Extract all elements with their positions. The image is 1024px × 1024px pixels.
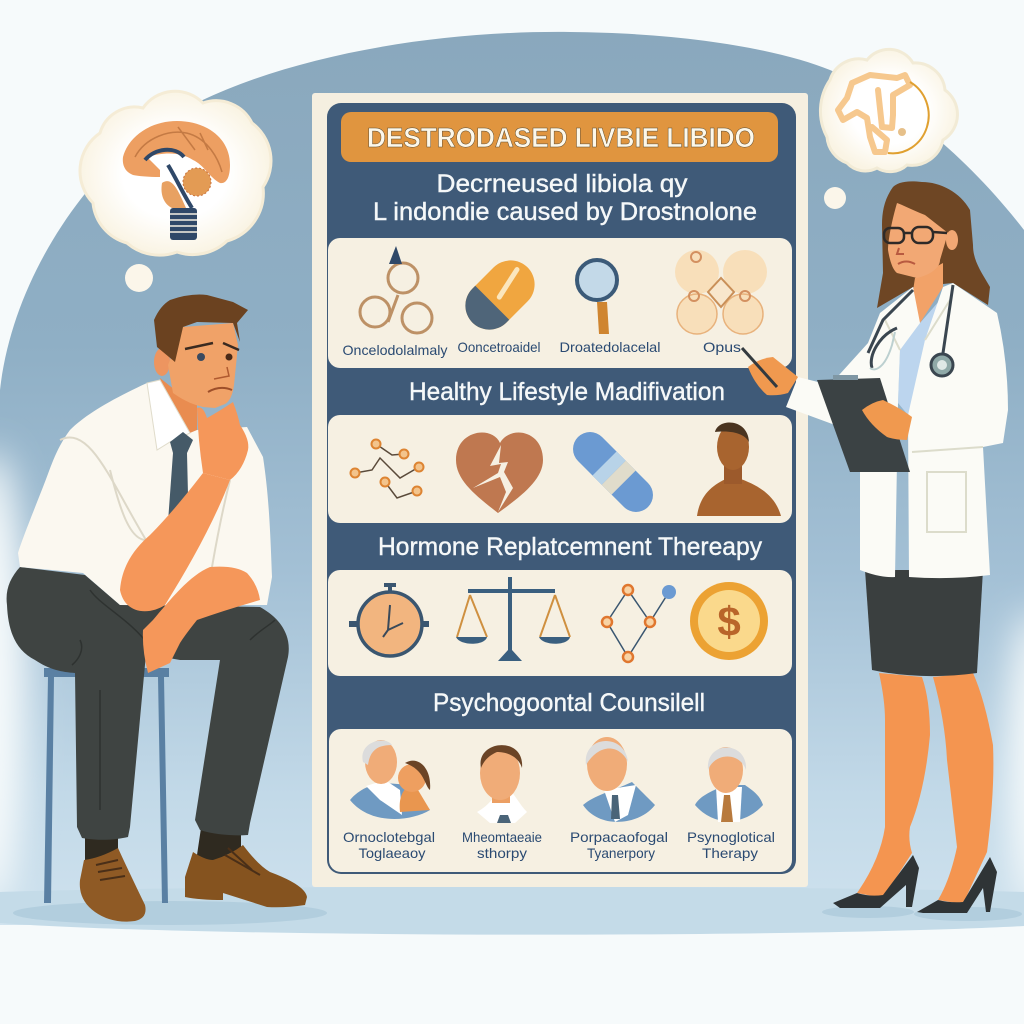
icon: older man with tie (695, 747, 763, 822)
face (888, 203, 948, 278)
heels (833, 855, 919, 908)
nose and mouth (897, 248, 915, 264)
clipboard (817, 378, 910, 472)
coat pocket (927, 472, 966, 532)
labels: Therapy (702, 845, 758, 861)
labels: Psynoglotical (687, 829, 775, 845)
head (168, 323, 238, 408)
icon: network lines (350, 440, 424, 498)
icon: brain on screw (123, 121, 230, 240)
labels: Oncelodolalmaly (342, 342, 448, 358)
shoes (80, 848, 146, 922)
labels: Droatedolacelal (560, 339, 660, 355)
labels: Mheomtaeaie (462, 829, 542, 845)
icon: linked rings (360, 246, 432, 333)
labels: Tyanerpory (587, 845, 655, 861)
clip (833, 375, 858, 380)
lower forearm and hand (143, 567, 260, 673)
row 1: causes (328, 238, 792, 368)
subtitle: L indondie caused by Drostnolone (373, 198, 757, 226)
face details (185, 343, 239, 392)
trousers (7, 567, 289, 840)
collar (147, 380, 190, 450)
heading: hormone: Hormone Replatcemnent Thereapy (378, 533, 762, 561)
subtitle: Decrneused libiola qy (436, 170, 688, 198)
small puff (824, 187, 846, 209)
glasses (884, 227, 947, 243)
title banner: DESTRODASED LIVBIE LIBIDO (367, 122, 755, 153)
labels: Opus (703, 339, 741, 355)
labels: Toglaeaoy (358, 845, 426, 861)
labels (343, 829, 775, 861)
icon: clock (349, 583, 429, 656)
neck (160, 378, 197, 435)
hand on clipboard (862, 400, 912, 440)
icon: diamond network (602, 585, 676, 662)
thought bubble: brain (80, 91, 271, 292)
icon: scales (456, 577, 570, 661)
coat (908, 283, 1008, 578)
row 2: lifestyle (328, 415, 792, 523)
row 4: counselling (329, 729, 792, 872)
labels: Ornoclotebgal (343, 829, 435, 845)
neck (912, 263, 943, 323)
icon: capsule (455, 250, 545, 340)
icon: abstract symbol (838, 75, 910, 152)
title banner (341, 112, 778, 162)
raised forearm (120, 473, 230, 611)
icon: magnifier (577, 260, 617, 334)
blouse (898, 300, 940, 415)
heading: counselling: Psychogoontal Counsilell (433, 689, 705, 717)
ear (154, 348, 170, 376)
stethoscope (868, 285, 953, 376)
labels: Porpacaofogal (570, 829, 668, 845)
icon: man (477, 745, 527, 823)
figure: doctor (742, 181, 1008, 913)
hand on chin (197, 402, 248, 480)
icon: couple (350, 740, 430, 819)
pointing hand (748, 357, 798, 395)
shirt (18, 380, 272, 605)
figure: seated man (7, 295, 307, 922)
hair (154, 295, 248, 362)
row 3: hormone (328, 570, 792, 676)
socks (85, 828, 241, 862)
labels: Ooncetroaidel (458, 339, 540, 355)
icon: molecule (675, 250, 767, 334)
heading: lifestyle: Healthy Lifestyle Madifivation (409, 378, 725, 406)
icon: older man (583, 737, 655, 822)
tie (168, 432, 193, 522)
icon: pill (566, 425, 660, 519)
pen (742, 348, 777, 387)
thought bubble: top right (820, 49, 957, 209)
icon: man torso (697, 423, 781, 516)
icon: dollar coin (690, 582, 768, 660)
subtitle (373, 170, 757, 226)
small puff (125, 264, 153, 292)
labels (342, 339, 741, 358)
skirt (865, 570, 983, 676)
icon: dollar coin: $ (717, 598, 741, 645)
icon: broken heart (456, 433, 543, 513)
stool (44, 668, 169, 903)
hair (877, 181, 990, 308)
panel: treatment board (312, 93, 808, 887)
legs (857, 673, 930, 898)
labels: sthorpy (477, 845, 527, 861)
